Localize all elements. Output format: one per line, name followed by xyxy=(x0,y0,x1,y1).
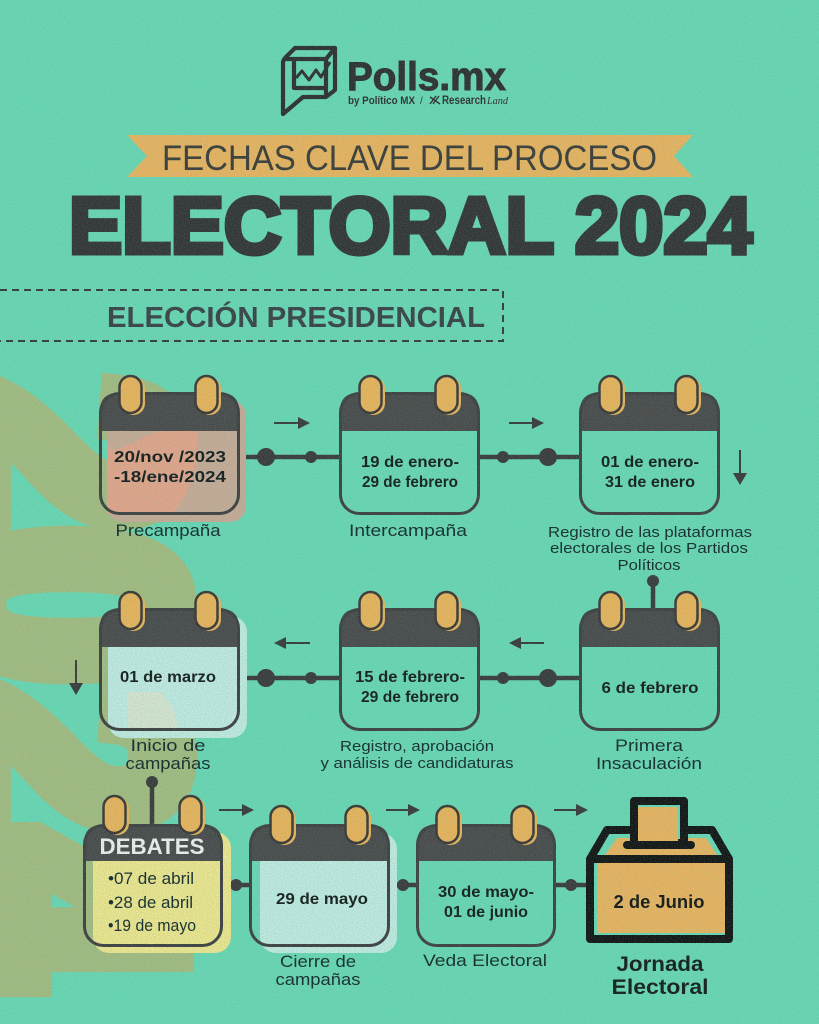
calendar: Primera Insaculación xyxy=(580,592,719,773)
logo partner script: Land xyxy=(486,95,508,107)
arrow right xyxy=(509,417,544,429)
calendar: Registro de plataformas xyxy=(548,376,752,574)
arrow left xyxy=(509,637,544,649)
pin connector xyxy=(647,575,659,609)
calendar: Intercampaña: 29 de febrero xyxy=(362,474,458,491)
calendar: Debates: •19 de mayo xyxy=(108,916,196,935)
date: 30 de mayo- xyxy=(438,884,534,901)
card fill xyxy=(260,833,397,953)
label: Registro, aprobación xyxy=(340,738,494,755)
date: 19 de enero- xyxy=(361,454,459,471)
arrow down xyxy=(69,660,83,695)
ballot box: Jornada Electoral: Electoral xyxy=(612,976,708,999)
arrow left xyxy=(274,637,310,649)
calendar: Precampaña: -18/ene/2024 xyxy=(114,469,226,486)
connector row 2 xyxy=(239,669,580,687)
logo partner mark xyxy=(430,96,440,104)
label: Precampaña xyxy=(116,521,221,540)
box outline xyxy=(590,859,729,939)
calendar: Intercampaña xyxy=(340,376,479,540)
arrow right xyxy=(386,804,420,816)
calendar: Debates xyxy=(84,796,231,953)
arrow right xyxy=(219,804,254,816)
label: Cierre de xyxy=(280,952,356,971)
calendar: Inicio de campañas: campañas xyxy=(126,754,210,773)
logo wordmark: Polls.mx xyxy=(347,55,506,99)
date: 20/nov /2023 xyxy=(114,449,226,466)
date: 2 de Junio xyxy=(614,892,705,912)
ballot box: Jornada Electoral xyxy=(590,801,729,999)
date list: •07 de abril xyxy=(108,869,194,888)
date: 15 de febrero- xyxy=(355,669,465,686)
ribbon shape xyxy=(127,135,693,177)
section heading: Elección presidencial xyxy=(0,290,503,341)
heading: DEBATES xyxy=(100,834,204,859)
calendar: Veda Electoral: 01 de junio xyxy=(444,904,528,921)
icon: chat cube with chart xyxy=(283,48,335,114)
card fill xyxy=(107,400,246,522)
calendar: Registro de candidaturas: y análisis de candidaturas xyxy=(320,755,514,772)
calendar: Registro de plataformas: electorales de los Partidos xyxy=(550,540,748,557)
calendar: Inicio de campañas xyxy=(100,592,247,773)
connector row 3 xyxy=(222,879,590,891)
date: 6 de febrero xyxy=(602,680,699,697)
label: Intercampaña xyxy=(349,521,468,540)
calendar: Primera Insaculación: Insaculación xyxy=(596,754,702,773)
label: Inicio de xyxy=(130,736,206,755)
label: Jornada xyxy=(616,953,704,976)
calendar: Cierre de campañas xyxy=(250,806,397,989)
ribbon heading xyxy=(127,135,693,178)
label: Veda Electoral xyxy=(423,951,547,970)
label: Registro de las plataformas xyxy=(548,524,752,541)
logo: Polls.mx xyxy=(283,48,508,114)
date: 01 de enero- xyxy=(601,454,699,471)
arrow right xyxy=(274,417,310,429)
date: 01 de marzo xyxy=(120,669,216,686)
ribbon text: FECHAS CLAVE DEL PROCESO xyxy=(162,139,657,178)
logo partner name: Research xyxy=(442,95,486,107)
ballot xyxy=(634,801,684,843)
box fills xyxy=(605,838,717,855)
arrow down xyxy=(733,450,747,485)
title: ELECTORAL 2024 xyxy=(69,181,753,270)
calendar: Registro de plataformas: Políticos xyxy=(618,557,680,574)
pin connector xyxy=(146,776,158,825)
logo separator: / xyxy=(420,96,423,107)
section text: ELECCIÓN PRESIDENCIAL xyxy=(107,300,485,334)
calendar: Precampaña xyxy=(100,376,246,540)
calendar: Debates: •28 de abril xyxy=(108,893,193,912)
calendar: Registro de candidaturas: 29 de febrero xyxy=(361,689,459,706)
logo subtitle: by Político MX xyxy=(348,95,416,107)
dashed box xyxy=(0,290,503,341)
arrow right xyxy=(554,804,588,816)
label: Primera xyxy=(615,736,684,755)
connector row 1 xyxy=(239,448,580,466)
date: 29 de mayo xyxy=(276,891,368,908)
calendar: Veda Electoral xyxy=(417,806,555,970)
calendar: Cierre de campañas: campañas xyxy=(276,970,360,989)
calendar: Registro de candidaturas xyxy=(320,592,514,772)
card fill xyxy=(93,832,231,953)
calendar: Registro de plataformas: 31 de enero xyxy=(605,474,695,491)
card fill xyxy=(108,616,247,738)
